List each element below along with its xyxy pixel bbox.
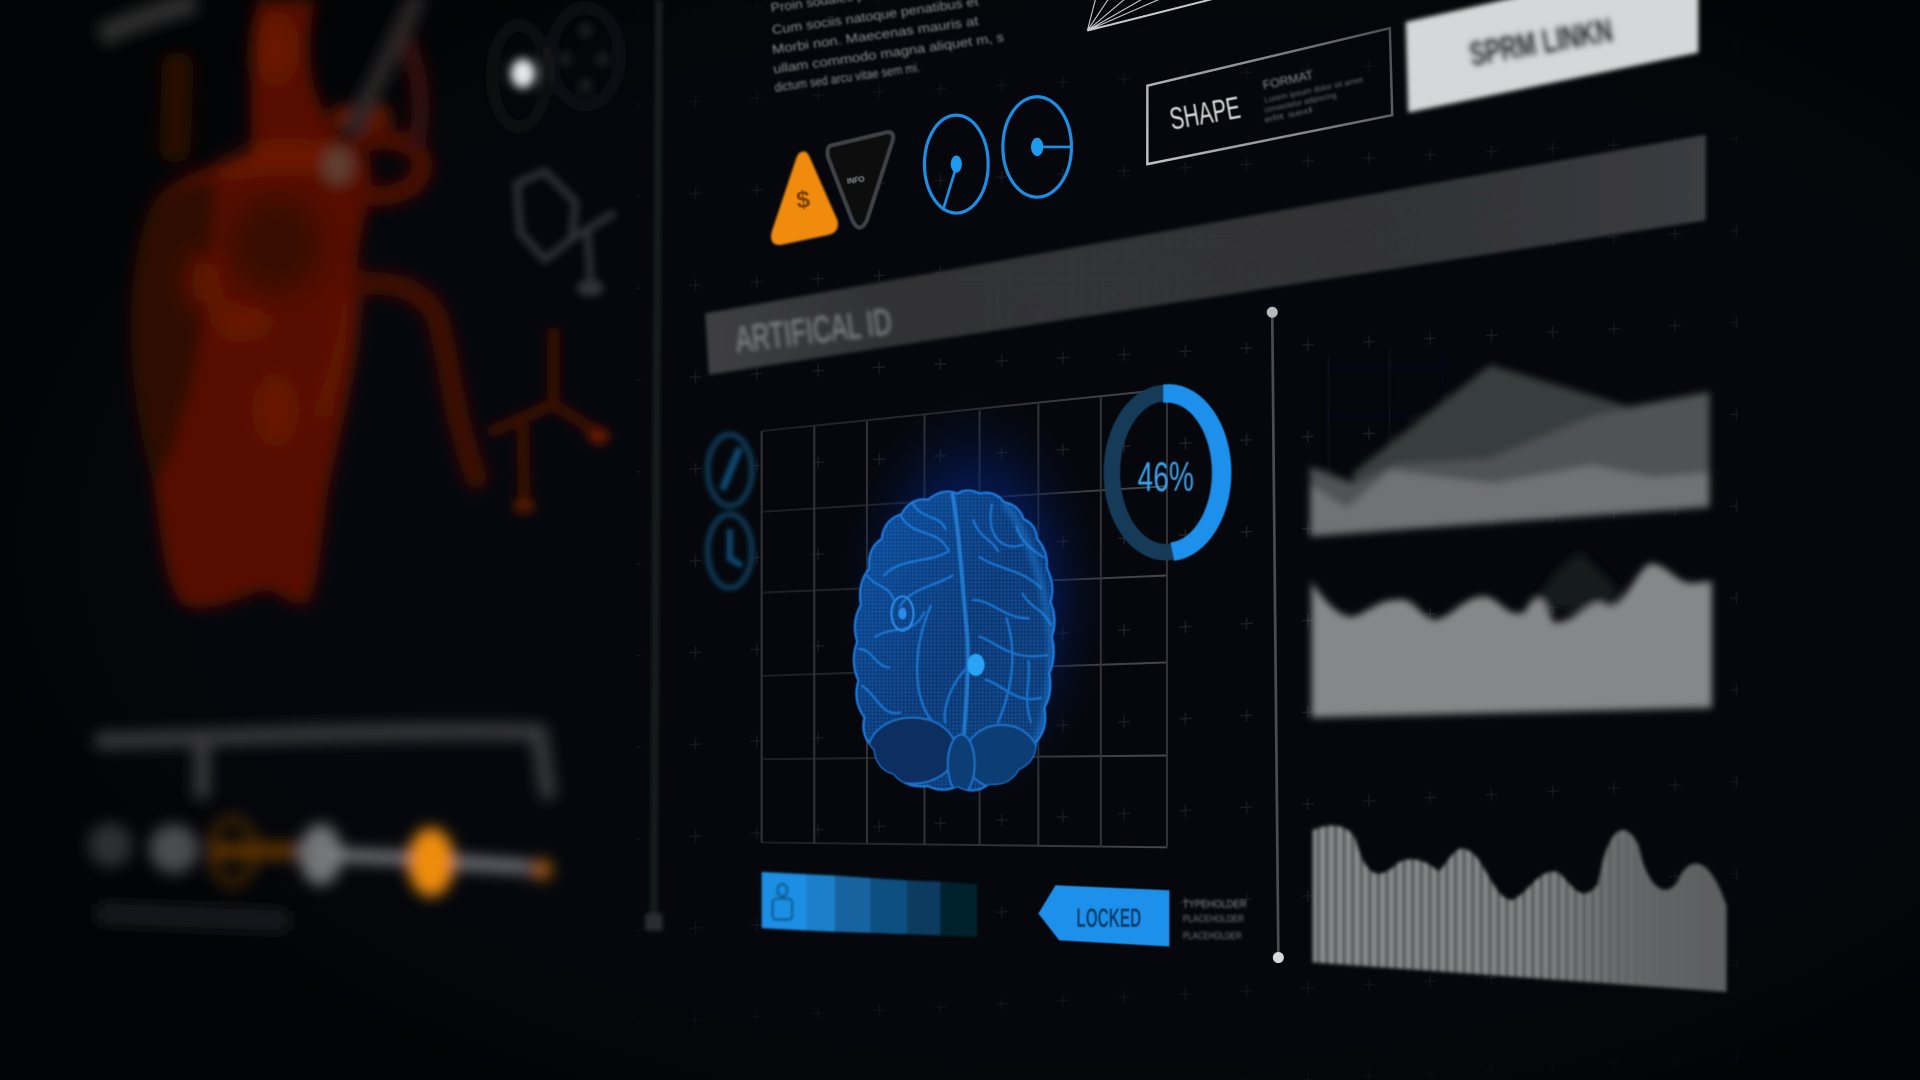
mechanism frame (96, 731, 549, 798)
heart vessels (175, 37, 423, 196)
target ring (891, 596, 913, 631)
band title: ARTIFICAL ID (733, 301, 894, 361)
heart body (131, 0, 372, 608)
tag caption: PLACEHOLDER (1183, 914, 1244, 925)
tag caption: TYPEHOLDER (1183, 898, 1247, 910)
chart backing grid (1322, 349, 1445, 471)
tag caption: PLACEHOLDER (1183, 931, 1242, 942)
dial gauge left (924, 115, 988, 213)
heart darker left chamber (131, 181, 218, 485)
orange tip (530, 860, 552, 879)
front layer (1310, 465, 1709, 536)
format label: consectetur adipiscing (1263, 91, 1337, 115)
shape label: SHAPE (1167, 89, 1243, 137)
locked label: LOCKED (1076, 903, 1141, 933)
button label: SPRM LINKN (1467, 11, 1616, 74)
brain glow (839, 392, 1108, 808)
wrench icon (708, 435, 752, 506)
orange node (408, 828, 454, 896)
cerebellum lobes (868, 718, 1038, 793)
wave body (1311, 563, 1712, 718)
orange molecule (493, 333, 610, 514)
gray nodes (88, 823, 342, 885)
dial gauge right (1003, 97, 1071, 197)
shape box (1147, 28, 1392, 164)
chart: striped bars (1313, 825, 1727, 992)
instrument tip (323, 147, 353, 184)
chart: wave area (1311, 551, 1712, 718)
heart centre shade (229, 196, 322, 294)
format label: elit sed (1263, 105, 1313, 124)
gray molecule (517, 171, 612, 293)
brain right-side ridge (1004, 502, 1051, 742)
side icons (708, 435, 752, 588)
grid panel (762, 389, 1167, 847)
badge label: INFO (846, 174, 865, 186)
donut value arc (1163, 384, 1231, 561)
background crosshair field (636, 60, 1739, 1022)
brain scan (854, 490, 1055, 793)
circular scan icons (492, 7, 620, 127)
donut value: 46% (1138, 453, 1194, 500)
panel: heart anatomy (100, 0, 476, 608)
brain folds (860, 495, 1051, 765)
text block top: Morbi non. Maecenas mauris at (771, 13, 980, 57)
fan wireframe (1087, 0, 1218, 31)
striped body (1313, 825, 1727, 992)
tag caption (1183, 898, 1247, 942)
text block top: dictum sed arcu vitae sem mi. (773, 60, 921, 95)
inverted triangle badge (827, 132, 893, 228)
top-left fragment (100, 2, 196, 37)
donut track (1112, 393, 1220, 552)
dim orange assembly (208, 819, 300, 883)
brain marker (967, 654, 984, 676)
right focus falloff (1313, 825, 1727, 992)
divider left (645, 0, 662, 931)
header band (705, 135, 1706, 375)
format label: Lorem ipsum dolor sit amet (1263, 75, 1364, 105)
text block top (770, 0, 1005, 95)
donut chart 46% (1112, 384, 1231, 561)
clock icon (708, 514, 752, 588)
wave shadow (1531, 551, 1622, 612)
mechanism lower bar (98, 913, 288, 921)
heart highlights (185, 17, 355, 442)
locked tag (1038, 885, 1169, 947)
format label: FORMAT (1261, 68, 1315, 92)
person icon (773, 884, 792, 920)
text block top: ullam commodo magna aliquet m, s (772, 29, 1005, 76)
panel: molecule icons (492, 7, 620, 514)
heart tube (358, 283, 476, 478)
middle layer (1310, 392, 1709, 536)
gradient level bar (762, 872, 977, 937)
instrument rod (351, 0, 419, 132)
drive rod (331, 855, 529, 867)
warning symbol: $ (795, 186, 812, 214)
brain silhouette (854, 490, 1055, 790)
brain dot texture (854, 490, 1055, 790)
chart: layered area (1310, 349, 1709, 536)
format label (1261, 68, 1364, 124)
warning triangle (771, 151, 838, 245)
back layer (1353, 365, 1709, 490)
band shading (705, 135, 1706, 375)
divider right (1267, 307, 1284, 963)
white button (1406, 0, 1698, 113)
panel: mechanism diagram (88, 731, 552, 921)
